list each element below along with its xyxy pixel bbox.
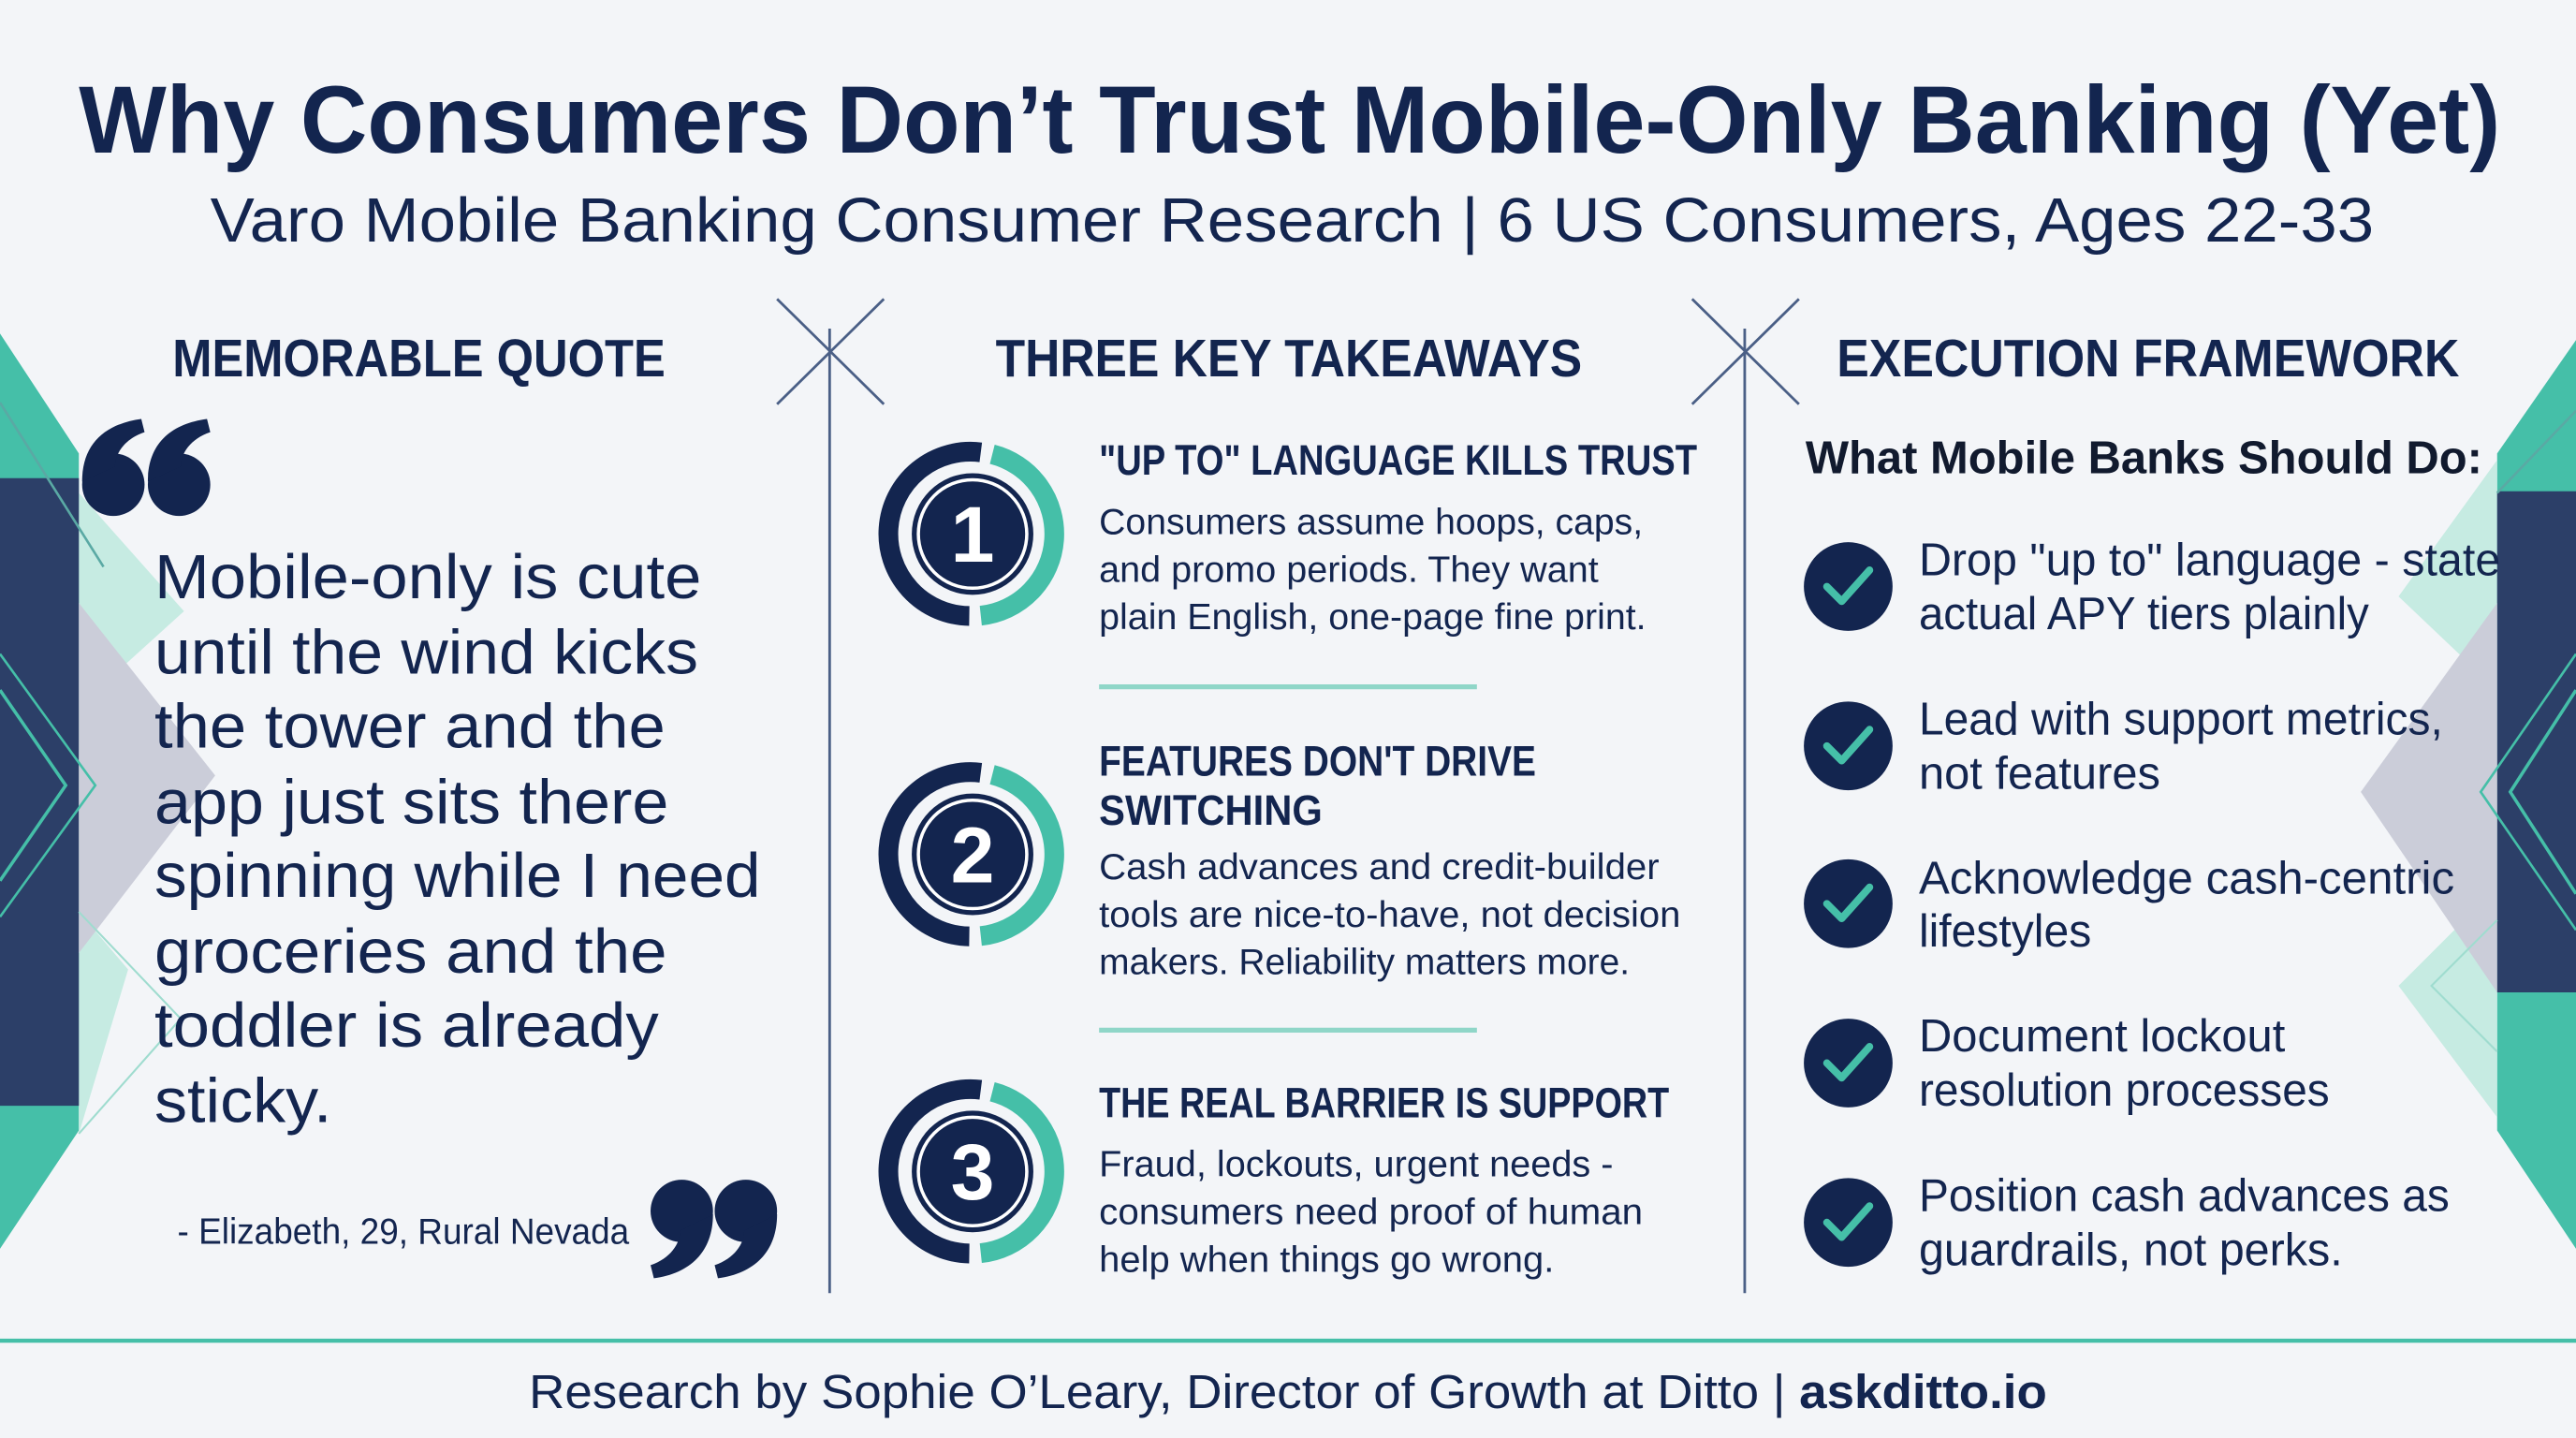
footer rule (0, 1340, 2576, 1342)
quote text: groceries and the (154, 917, 667, 987)
checklist: Drop "up to" language - state (1919, 535, 2500, 585)
takeaway 2 (888, 737, 1680, 983)
takeaway 2: SWITCHING (1099, 786, 1323, 834)
takeaway 1: Consumers assume hoops, caps, (1099, 502, 1643, 542)
takeaway 1: plain English, one-page fine print. (1099, 597, 1647, 638)
quote text: sticky. (154, 1067, 332, 1137)
takeaway 3: THE REAL BARRIER IS SUPPORT (1099, 1078, 1669, 1126)
icon: number 1 (888, 451, 1054, 616)
decoration: left geometric shapes (0, 333, 215, 1249)
checklist: lifestyles (1919, 906, 2091, 957)
icon: number 3 (888, 1089, 1054, 1254)
takeaway 3: help when things go wrong. (1099, 1240, 1554, 1280)
attribution: - Elizabeth, 29, Rural Nevada (178, 1212, 630, 1253)
icon: number 2: 2 (951, 811, 994, 899)
subheading: What Mobile Banks Should Do: (1806, 433, 2482, 483)
takeaway 2: Cash advances and credit-builder (1099, 847, 1660, 888)
panel: memorable quote (82, 329, 777, 1278)
icon: close quote mark (651, 1180, 777, 1278)
takeaway 1: and promo periods. They want (1099, 550, 1599, 590)
checklist: Lead with support metrics, (1919, 694, 2443, 744)
panel: execution framework (1804, 329, 2500, 1275)
title: Why Consumers Don’t Trust Mobile-Only Banking (Yet) (79, 66, 2500, 173)
quote text: until the wind kicks (154, 619, 698, 688)
quote text: toddler is already (154, 991, 659, 1061)
footer credit: Research by Sophie O’Leary, Director of Growth at Ditto | askditto.io (529, 1365, 2047, 1418)
takeaway 3: consumers need proof of human (1099, 1192, 1643, 1232)
panel: three key takeaways (888, 329, 1697, 1280)
quote text: app just sits there (154, 768, 668, 837)
heading: three key takeaways: THREE KEY TAKEAWAYS (996, 329, 1582, 388)
takeaway 2: tools are nice-to-have, not decision (1099, 895, 1680, 935)
subtitle: Varo Mobile Banking Consumer Research | 6 US Consumers, Ages 22-33 (211, 186, 2374, 256)
quote text: the tower and the (154, 693, 666, 762)
checklist: Acknowledge cash-centric (1919, 854, 2454, 904)
quote text: spinning while I need (154, 842, 761, 911)
takeaway 3 (888, 1078, 1669, 1280)
icon: number 2 (888, 772, 1054, 936)
heading: execution framework: EXECUTION FRAMEWORK (1837, 329, 2460, 388)
heading: memorable quote: MEMORABLE QUOTE (172, 329, 666, 388)
checklist: guardrails, not perks. (1919, 1225, 2343, 1275)
icon: number 1: 1 (951, 491, 994, 579)
icon: number 3: 3 (951, 1128, 994, 1216)
takeaway 1 (888, 436, 1697, 638)
takeaway 1: "UP TO" LANGUAGE KILLS TRUST (1099, 436, 1697, 484)
checklist: resolution processes (1919, 1065, 2330, 1116)
checklist: Document lockout (1919, 1011, 2286, 1062)
takeaway 2: makers. Reliability matters more. (1099, 943, 1630, 983)
checklist: Position cash advances as (1919, 1170, 2450, 1221)
checklist (1804, 535, 2500, 1275)
quote text: Mobile-only is cute (154, 543, 701, 612)
takeaway 2: FEATURES DON'T DRIVE (1099, 737, 1536, 785)
checklist: actual APY tiers plainly (1919, 589, 2369, 639)
quote text (154, 543, 761, 1137)
dividers with crosses (777, 299, 1799, 1293)
takeaway 3: Fraud, lockouts, urgent needs - (1099, 1145, 1614, 1185)
icon: open quote mark (82, 419, 211, 516)
decoration: right geometric shapes (2361, 340, 2576, 1249)
checklist: not features (1919, 748, 2160, 799)
